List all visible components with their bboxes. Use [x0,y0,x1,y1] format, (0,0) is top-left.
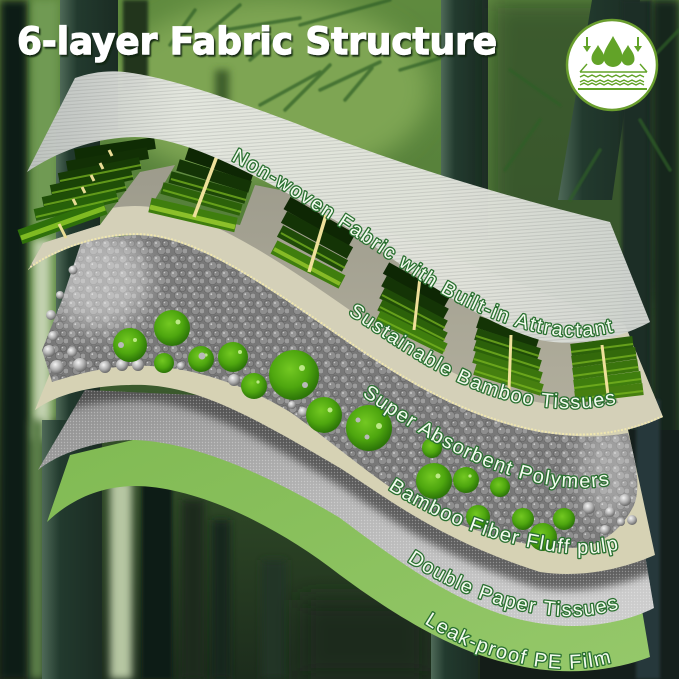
leaves [170,0,679,200]
label: super absorbent polymers: Super Absorbent Polymers [362,384,610,491]
layer 6: leak-proof PE film [47,400,650,671]
bamboo strips: column 1 [20,143,155,238]
icon: absorption badge [567,20,657,110]
green swollen polymer spheres [113,310,575,551]
loose polymer beads [43,266,637,535]
bamboo strips: column 6 [571,342,643,399]
label: bamboo tissues: Sustainable Bamboo Tissues [348,303,616,410]
layer 5: double paper tissues [35,389,655,626]
bamboo strips: column 2 [150,148,253,227]
bamboo strips: column 3 [274,203,352,284]
label: PE film: Leak-proof PE Film [424,611,612,670]
label: non-woven fabric: Non-woven Fabric with Built-in Attractant [231,147,615,338]
bamboo strips: column 5 [474,322,542,392]
label: fluff pulp: Bamboo Fiber Fluff pulp [388,476,618,560]
layer 3-4: bamboo fiber fluff pulp [35,240,655,574]
super absorbent polymers [30,230,650,560]
bamboo strips: column 4 [378,268,447,351]
layer 2: sustainable bamboo tissues [28,165,663,436]
label: double paper tissues: Double Paper Tissues [407,549,619,618]
layer 1: non-woven fabric sheet [27,71,650,343]
title: 6-layer Fabric Structure [17,20,497,63]
